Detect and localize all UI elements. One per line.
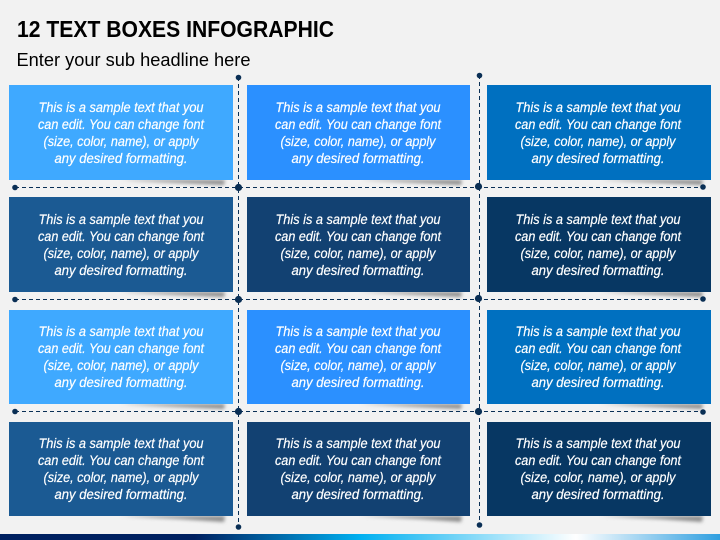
box row 3 column 3: (size, color, name), or apply [520,358,677,373]
box row 3 column 1: This is a sample text that you [38,324,204,339]
box row 3 column 1: any desired formatting. [54,375,188,390]
box shadows [120,180,703,522]
box row 4 column 3: can edit. You can change font [515,453,682,468]
sub headline: Enter your sub headline here [16,50,250,70]
box row 2 column 2 [247,197,470,292]
box row 2 column 3: can edit. You can change font [515,229,682,244]
box row 4 column 2: (size, color, name), or apply [280,470,437,485]
box row 4 column 1: can edit. You can change font [38,453,205,468]
box row 4 column 1 [9,422,233,516]
box row 4 column 2 [247,422,470,516]
box row 2 column 2: This is a sample text that you [276,212,441,227]
box row 3 column 3: any desired formatting. [532,375,664,390]
box row 4 column 3: (size, color, name), or apply [520,470,677,485]
box row 2 column 1: (size, color, name), or apply [44,246,200,261]
bottom gradient bar [0,534,720,540]
box row 3 column 2: can edit. You can change font [275,341,442,356]
box row 1 column 3: (size, color, name), or apply [520,134,677,149]
box row 3 column 2: any desired formatting. [292,375,424,390]
box row 1 column 1: can edit. You can change font [38,117,205,132]
box row 2 column 2: can edit. You can change font [275,229,442,244]
box row 2 column 3: This is a sample text that you [516,212,681,227]
box row 4 column 1: (size, color, name), or apply [44,470,200,485]
box row 1 column 1: any desired formatting. [54,151,188,166]
box row 2 column 1: This is a sample text that you [38,212,204,227]
box row 1 column 3: This is a sample text that you [516,100,681,115]
box row 3 column 2 [247,310,470,404]
box row 4 column 2: This is a sample text that you [276,436,441,451]
box row 3 column 3 [487,310,711,404]
box row 1 column 1 [9,85,233,180]
box row 1 column 3: can edit. You can change font [515,117,682,132]
box row 1 column 3 [487,85,711,180]
dashed grid lines [15,75,703,527]
box row 1 column 2: This is a sample text that you [276,100,441,115]
box row 2 column 2: (size, color, name), or apply [280,246,437,261]
box row 1 column 2: (size, color, name), or apply [280,134,437,149]
box row 4 column 1: This is a sample text that you [38,436,204,451]
box row 2 column 1: can edit. You can change font [38,229,205,244]
box row 3 column 2: (size, color, name), or apply [280,358,437,373]
box row 3 column 1 [9,310,233,404]
box row 4 column 2: any desired formatting. [292,487,424,502]
box row 4 column 1: any desired formatting. [54,487,188,502]
box row 2 column 1: any desired formatting. [54,263,188,278]
box row 4 column 2: can edit. You can change font [275,453,442,468]
box row 2 column 3: any desired formatting. [532,263,664,278]
box row 3 column 3: This is a sample text that you [516,324,681,339]
box row 1 column 2: any desired formatting. [292,151,424,166]
box row 4 column 3: any desired formatting. [532,487,664,502]
box row 2 column 3 [487,197,711,292]
box row 3 column 1: (size, color, name), or apply [44,358,200,373]
box row 1 column 1: This is a sample text that you [38,100,204,115]
box row 4 column 3 [487,422,711,516]
box row 1 column 2 [247,85,470,180]
box row 2 column 2: any desired formatting. [292,263,424,278]
box row 2 column 3: (size, color, name), or apply [520,246,677,261]
title: 12 TEXT BOXES INFOGRAPHIC [17,16,334,42]
box row 3 column 1: can edit. You can change font [38,341,205,356]
box row 2 column 1 [9,197,233,292]
box row 1 column 3: any desired formatting. [532,151,664,166]
box row 4 column 3: This is a sample text that you [516,436,681,451]
box row 3 column 2: This is a sample text that you [276,324,441,339]
box row 1 column 2: can edit. You can change font [275,117,442,132]
box row 3 column 3: can edit. You can change font [515,341,682,356]
box row 1 column 1: (size, color, name), or apply [44,134,200,149]
